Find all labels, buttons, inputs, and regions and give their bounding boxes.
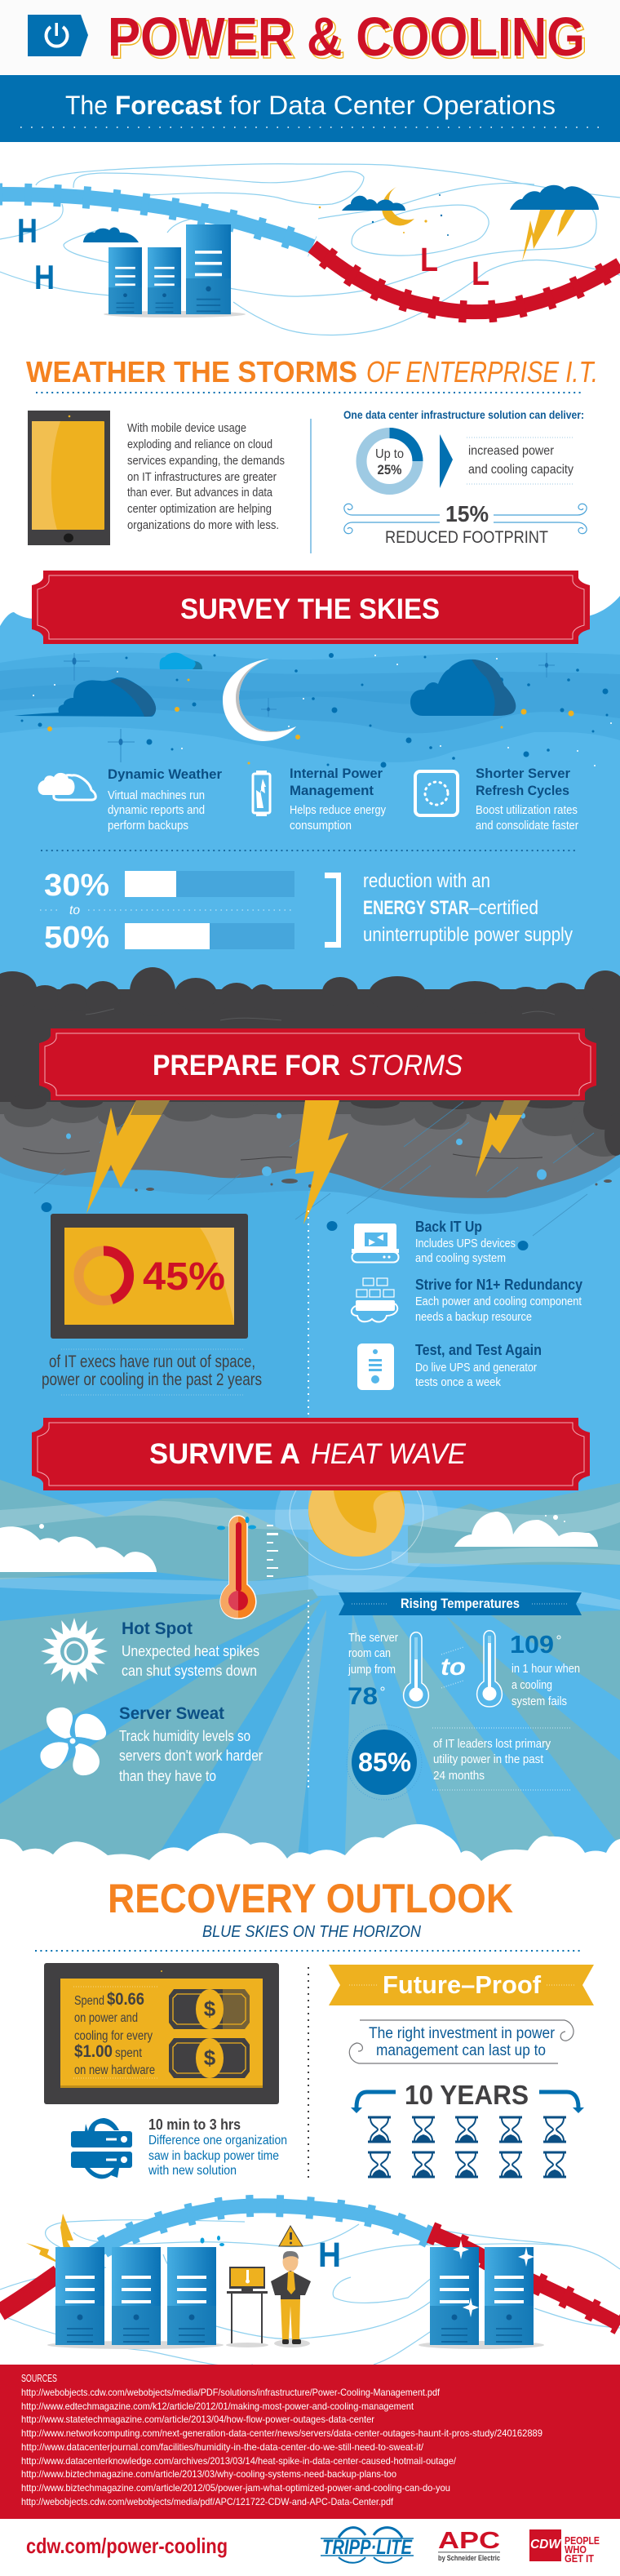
- sweat drops: [201, 2236, 224, 2246]
- feature: server sweat: Server Sweat: [119, 1704, 224, 1723]
- server racks: [47, 2247, 544, 2349]
- feature: back it up: Back IT Up: [415, 1219, 482, 1235]
- donut chart: up to 25%: 25%: [377, 462, 401, 477]
- 45% caption: of IT execs have run out of space,: [49, 1352, 255, 1371]
- icon: cloud servers: [352, 1278, 397, 1321]
- icon: ups unit: [357, 1344, 394, 1390]
- servers: [104, 224, 246, 318]
- spending text: Spend: [74, 1994, 104, 2008]
- feature: n1+ redundancy: Strive for N1+ Redundancy: [415, 1277, 582, 1293]
- capacity text: and cooling capacity: [468, 463, 574, 477]
- feature: test and test again: [357, 1342, 542, 1390]
- pressure labels: H: [17, 211, 38, 250]
- grey cloud: [0, 1012, 620, 1198]
- banner: survive a heat wave: [32, 1418, 590, 1490]
- bar chart: 30% to 50% reduction: 30%: [44, 868, 109, 903]
- spending text: $1.00: [74, 2042, 113, 2061]
- temperature 78: The server: [348, 1631, 398, 1645]
- sources panel: http://www.biztechmagazine.com/article/2012/05/power-jam-what-optimized-power-and-cooling-can-do-you: [21, 2482, 450, 2494]
- icon: cloud left: [83, 227, 139, 242]
- warm front left: [0, 2273, 59, 2312]
- white cloud edge: [0, 1824, 620, 1959]
- capacity text: [467, 437, 574, 484]
- feature: backup time: [71, 2116, 287, 2178]
- footprint stat: [344, 501, 587, 547]
- footprint stat: 15%: [445, 501, 489, 526]
- feature: server sweat: Track humidity levels so: [119, 1728, 250, 1744]
- feature: shorter server refresh cycles: Shorter Server: [476, 766, 570, 781]
- footprint stat: REDUCED FOOTPRINT: [385, 528, 548, 547]
- feature: backup time: with new solution: [148, 2164, 237, 2178]
- panel: 45% stat tablet: 45%: [143, 1255, 225, 1299]
- pale waves: [0, 1501, 620, 1610]
- isobar lines: [0, 2220, 620, 2366]
- feature: back it up: [352, 1219, 516, 1265]
- pressure labels: H: [34, 258, 55, 296]
- icon: dollar bills: [169, 1989, 250, 2078]
- pressure labels low: L: [420, 241, 438, 278]
- feature: n1+ redundancy: needs a backup resource: [415, 1310, 532, 1324]
- feature: test and test again: tests once a week: [415, 1375, 501, 1389]
- feature: n1+ redundancy: [352, 1277, 582, 1324]
- icon: drive: [352, 1224, 399, 1262]
- spending text: spent: [115, 2046, 142, 2060]
- lower cloud band: [0, 1012, 620, 1214]
- sun rays: [0, 1589, 620, 1877]
- spending text: $0.66: [107, 1990, 144, 2009]
- feature: dynamic weather: dynamic reports and: [108, 803, 205, 817]
- temperature 109: [510, 1630, 580, 1708]
- subtitle band: [0, 75, 620, 142]
- subtitle band: The: [65, 91, 108, 120]
- sources panel: http://webobjects.cdw.com/webobjects/media/PDF/solutions/infrastructure/Power-Cooling-Management.pdf: [21, 2387, 441, 2398]
- icon: thermometer high: [477, 1631, 502, 1707]
- icon: monitor on table: [226, 2267, 268, 2347]
- feature: server sweat: than they have to: [119, 1768, 216, 1784]
- feature: hot spot: Hot Spot: [122, 1619, 193, 1638]
- rain lines: [34, 1102, 594, 1236]
- rain drops: [66, 1113, 547, 1180]
- lightning on servers: [26, 2214, 73, 2263]
- feature: hot spot: Unexpected heat spikes: [122, 1643, 259, 1659]
- sun halo: [275, 1445, 438, 1592]
- banner: survey the skies: [32, 571, 590, 644]
- cold front arch: [73, 2205, 431, 2267]
- banner: prepare for storms: [39, 1028, 596, 1100]
- spending text: on new hardware: [74, 2063, 155, 2077]
- temperature 78: jump from: [348, 1663, 396, 1677]
- word: to: to: [441, 1654, 466, 1681]
- feature: test and test again: Do live UPS and generator: [415, 1361, 537, 1375]
- logo: apc: [438, 2528, 500, 2562]
- 45% caption: [42, 1349, 262, 1395]
- bar chart: 30% to 50% reduction: to: [69, 904, 80, 917]
- ribbon: [329, 1965, 594, 2005]
- temperature 109: 109: [510, 1630, 554, 1659]
- scroll text: [349, 2020, 574, 2063]
- icon: dollar bills: $: [204, 1996, 216, 2021]
- sources panel: http://www.edtechmagazine.com/k12/article/2012/01/making-most-power-and-cooling-management: [21, 2401, 414, 2412]
- feature: internal power management: Helps reduce energy: [290, 803, 386, 817]
- icon: white cloud left: [0, 1524, 157, 1572]
- bracket: [325, 873, 341, 948]
- scroll text: management can last up to: [376, 2042, 546, 2059]
- icon: heat burst: [41, 1618, 108, 1685]
- logo: cdw: GET IT: [565, 2552, 594, 2565]
- panel: 45% stat tablet: [51, 1214, 248, 1339]
- icon: power button: [28, 15, 88, 56]
- feature: backup time: saw in backup power time: [148, 2149, 279, 2163]
- energy star text: reduction with an: [363, 870, 490, 892]
- sources panel: http://www.statetechmagazine.com/article/2013/04/how-flow-power-outages-data-center: [21, 2414, 374, 2425]
- warm front right: [431, 2232, 620, 2325]
- logo: tripp lite: TRIPP·LITE: [322, 2536, 413, 2559]
- mid cloud scallops: [0, 1094, 620, 1157]
- temperature 109: system fails: [512, 1694, 567, 1708]
- sources panel: http://www.networkcomputing.com/next-generation-data-center/news/servers/data-center-outages-haunt-it-pros-study/240162889: [21, 2427, 542, 2439]
- icon: sun: [290, 1459, 423, 1570]
- warm front: [312, 246, 620, 312]
- panel: spending tablet: [44, 1963, 279, 2104]
- intro paragraph: center optimization are helping: [127, 502, 272, 516]
- icon: dollar bills: $: [204, 2045, 216, 2070]
- icon: moon: [382, 187, 414, 225]
- panel: future-proof: [329, 1965, 594, 2177]
- energy star text: ENERGY STAR: [363, 897, 469, 919]
- bar chart: 30% to 50% reduction: 50%: [44, 921, 109, 955]
- feature: shorter server refresh cycles: Refresh Cycles: [476, 783, 569, 798]
- feature: shorter server refresh cycles: Boost utilization rates: [476, 803, 578, 817]
- intro paragraph: [127, 421, 285, 532]
- subtitle band: Forecast: [115, 91, 222, 120]
- icon: tablet: [28, 411, 110, 545]
- sources panel: http://www.datacenterjournal.com/facilities/humidity-in-the-data-center-do-we-still-need-to-sweat-it/: [21, 2441, 424, 2453]
- feature: dynamic weather: [38, 766, 222, 833]
- feature: dynamic weather: Virtual machines run: [108, 788, 205, 802]
- capacity text: increased power: [468, 444, 555, 458]
- icon: white cloud right: [454, 1512, 598, 1547]
- footer url: cdw.com/power-cooling: [26, 2534, 228, 2558]
- panel: rising temperatures: [339, 1592, 582, 1800]
- sparkles dark: [64, 653, 555, 762]
- scroll text: The right investment in power: [369, 2025, 556, 2042]
- ribbon: [339, 1592, 582, 1615]
- icon: night cloud left: [14, 677, 156, 717]
- feature: n1+ redundancy: Each power and cooling component: [415, 1295, 582, 1308]
- stat: 85%: [347, 1725, 571, 1800]
- feature: server sweat: [40, 1704, 263, 1784]
- pressure label: H: [318, 2236, 341, 2275]
- feature: test and test again: Test, and Test Again: [415, 1342, 542, 1358]
- subtitle band: for Data Center Operations: [229, 91, 556, 120]
- stat: 85%: 85%: [358, 1748, 411, 1777]
- icon: lightning bolts: [86, 1100, 530, 1224]
- arrow: [440, 434, 453, 488]
- icon: server refresh: [71, 2118, 132, 2178]
- heading: weather the storms: [26, 355, 598, 393]
- 45% caption: power or cooling in the past 2 years: [42, 1370, 262, 1389]
- sources panel: SOURCES: [21, 2372, 57, 2384]
- word: to: [441, 1647, 466, 1688]
- temperature 109: in 1 hour when: [512, 1662, 580, 1676]
- feature: back it up: and cooling system: [415, 1251, 506, 1265]
- stat: 85%: 24 months: [433, 1769, 485, 1783]
- icon: night cloud right: [410, 660, 516, 716]
- heading: recovery outlook: [35, 1876, 582, 1951]
- star field dark: [21, 653, 609, 767]
- sky waves: [0, 652, 620, 762]
- intro paragraph: on IT infrastructures are greater: [127, 470, 277, 484]
- intro paragraph: exploding and reliance on cloud: [127, 437, 272, 451]
- bar chart: 30% to 50% reduction: [40, 868, 294, 955]
- donut chart: up to 25%: [361, 433, 418, 490]
- icon: fan: [40, 1708, 106, 1775]
- section background: night sky: [0, 596, 620, 1012]
- logo: cdw: [529, 2529, 600, 2565]
- cloud wrinkle lines: [86, 1009, 555, 1020]
- figure: technician: [271, 2251, 311, 2347]
- pressure labels: [17, 211, 55, 296]
- feature: internal power management: consumption: [290, 819, 352, 833]
- logo: apc: by Schneider Electric: [438, 2554, 500, 2562]
- temperature 78: 78: [348, 1683, 378, 1710]
- feature: backup time: 10 min to 3 hrs: [148, 2116, 241, 2133]
- sources panel: [0, 2365, 620, 2519]
- panel: solution stats: [343, 408, 587, 547]
- intro paragraph: services expanding, the demands: [127, 454, 285, 468]
- panel: solution stats: One data center infrastructure solution can deliver:: [343, 408, 584, 421]
- header: logo and title: [0, 0, 620, 76]
- intro paragraph: than ever. But advances in data: [127, 486, 273, 500]
- temperature 109: a cooling: [512, 1678, 552, 1692]
- bottom weather map illustration: [0, 2205, 620, 2366]
- feature: dynamic weather: perform backups: [108, 819, 188, 833]
- intro paragraph: organizations do more with less.: [127, 518, 279, 532]
- hourglass grid: [368, 2117, 566, 2177]
- feature: hot spot: [41, 1618, 259, 1685]
- feature: back it up: Includes UPS devices: [415, 1237, 516, 1250]
- pressure labels low: L: [472, 255, 489, 292]
- banner: prepare for storms: STORMS: [349, 1050, 463, 1081]
- feature: server sweat: servers don't work harder: [119, 1748, 263, 1764]
- logo: tripp lite: [321, 2528, 414, 2563]
- feature: internal power management: Management: [290, 783, 374, 798]
- icon: clouds: [38, 773, 95, 800]
- sources panel: http://www.biztechmagazine.com/article/2013/03/why-cooling-systems-need-backup-plans-too: [21, 2468, 396, 2480]
- icon: storm cloud: [510, 185, 599, 261]
- feature: hot spot: can shut systems down: [122, 1663, 257, 1679]
- energy star text: –certified: [469, 897, 538, 919]
- sources panel: http://webobjects.cdw.com/webobjects/media/pdf/APC/121722-CDW-and-APC-Data-Center.pdf: [21, 2496, 394, 2507]
- weather map illustration: [0, 164, 620, 335]
- sparkles: [453, 2240, 534, 2317]
- icon: battery: [253, 771, 270, 816]
- icon: thermometer: [217, 1516, 278, 1619]
- feature: backup time: Difference one organization: [148, 2134, 287, 2147]
- icon: refresh loader: [415, 771, 458, 815]
- heading: recovery outlook: BLUE SKIES ON THE HORIZON: [202, 1923, 422, 1941]
- logo: cdw: WHO: [565, 2543, 587, 2556]
- icon: small top cloud: [160, 653, 202, 669]
- ten years: 10 YEARS: [405, 2080, 529, 2110]
- section background: storm sky: [0, 967, 620, 1469]
- donut chart: 45%: [78, 1250, 129, 1301]
- donut chart: up to 25%: Up to: [375, 447, 404, 461]
- intro paragraph: With mobile device usage: [127, 421, 246, 435]
- spending text: on power and: [74, 2011, 138, 2025]
- feature: shorter server refresh cycles: [415, 766, 578, 833]
- pressure labels low: [420, 241, 489, 292]
- banner: survey the skies: SURVEY THE SKIES: [180, 593, 440, 625]
- map stars: [372, 194, 449, 236]
- section background: heat wave sky: [0, 1445, 620, 1877]
- heading: recovery outlook: RECOVERY OUTLOOK: [108, 1876, 513, 1921]
- isobar lines: [0, 164, 620, 335]
- stat: 85%: utility power in the past: [433, 1752, 544, 1766]
- spending text: [74, 1990, 155, 2077]
- spending text: cooling for every: [74, 2029, 153, 2043]
- feature: dynamic weather: Dynamic Weather: [108, 766, 222, 782]
- energy star text: uninterruptible power supply: [363, 924, 573, 946]
- icon: crescent moon: [223, 659, 296, 741]
- temperature 78: [348, 1631, 398, 1710]
- dark cloud tops: [0, 967, 620, 1156]
- star field yellow: [47, 679, 574, 764]
- feature: shorter server refresh cycles: and consolidate faster: [476, 819, 578, 833]
- stat: 85%: of IT leaders lost primary: [433, 1737, 551, 1751]
- logo: apc: APC: [438, 2528, 500, 2554]
- logo: cdw: CDW: [530, 2538, 562, 2552]
- ribbon: Future–Proof: [383, 1970, 542, 1999]
- cold front: [0, 194, 312, 246]
- ten years: [351, 2080, 584, 2113]
- sources panel: http://www.datacenterknowledge.com/archives/2013/03/14/heat-spike-in-data-center-caused-hotmail-outage/: [21, 2455, 457, 2467]
- icon: cloud with moon: [342, 196, 405, 211]
- feature: internal power management: Internal Power: [290, 766, 383, 781]
- heading: weather the storms: WEATHER THE STORMS: [26, 355, 357, 389]
- star field white: [33, 655, 612, 766]
- energy star text: [363, 870, 573, 946]
- banner: survive a heat wave: SURVIVE A: [149, 1438, 300, 1470]
- temperature 78: room can: [348, 1646, 391, 1660]
- logo: cdw: PEOPLE: [565, 2534, 600, 2547]
- icon: warning sign: [279, 2226, 303, 2246]
- ribbon: Rising Temperatures: [401, 1596, 520, 1611]
- feature: internal power management: [253, 766, 386, 833]
- icon: thermometer low: [404, 1632, 428, 1708]
- banner: survive a heat wave: HEAT WAVE: [311, 1438, 467, 1470]
- banner: prepare for storms: PREPARE FOR: [153, 1050, 340, 1081]
- teal haze: [0, 1480, 620, 1582]
